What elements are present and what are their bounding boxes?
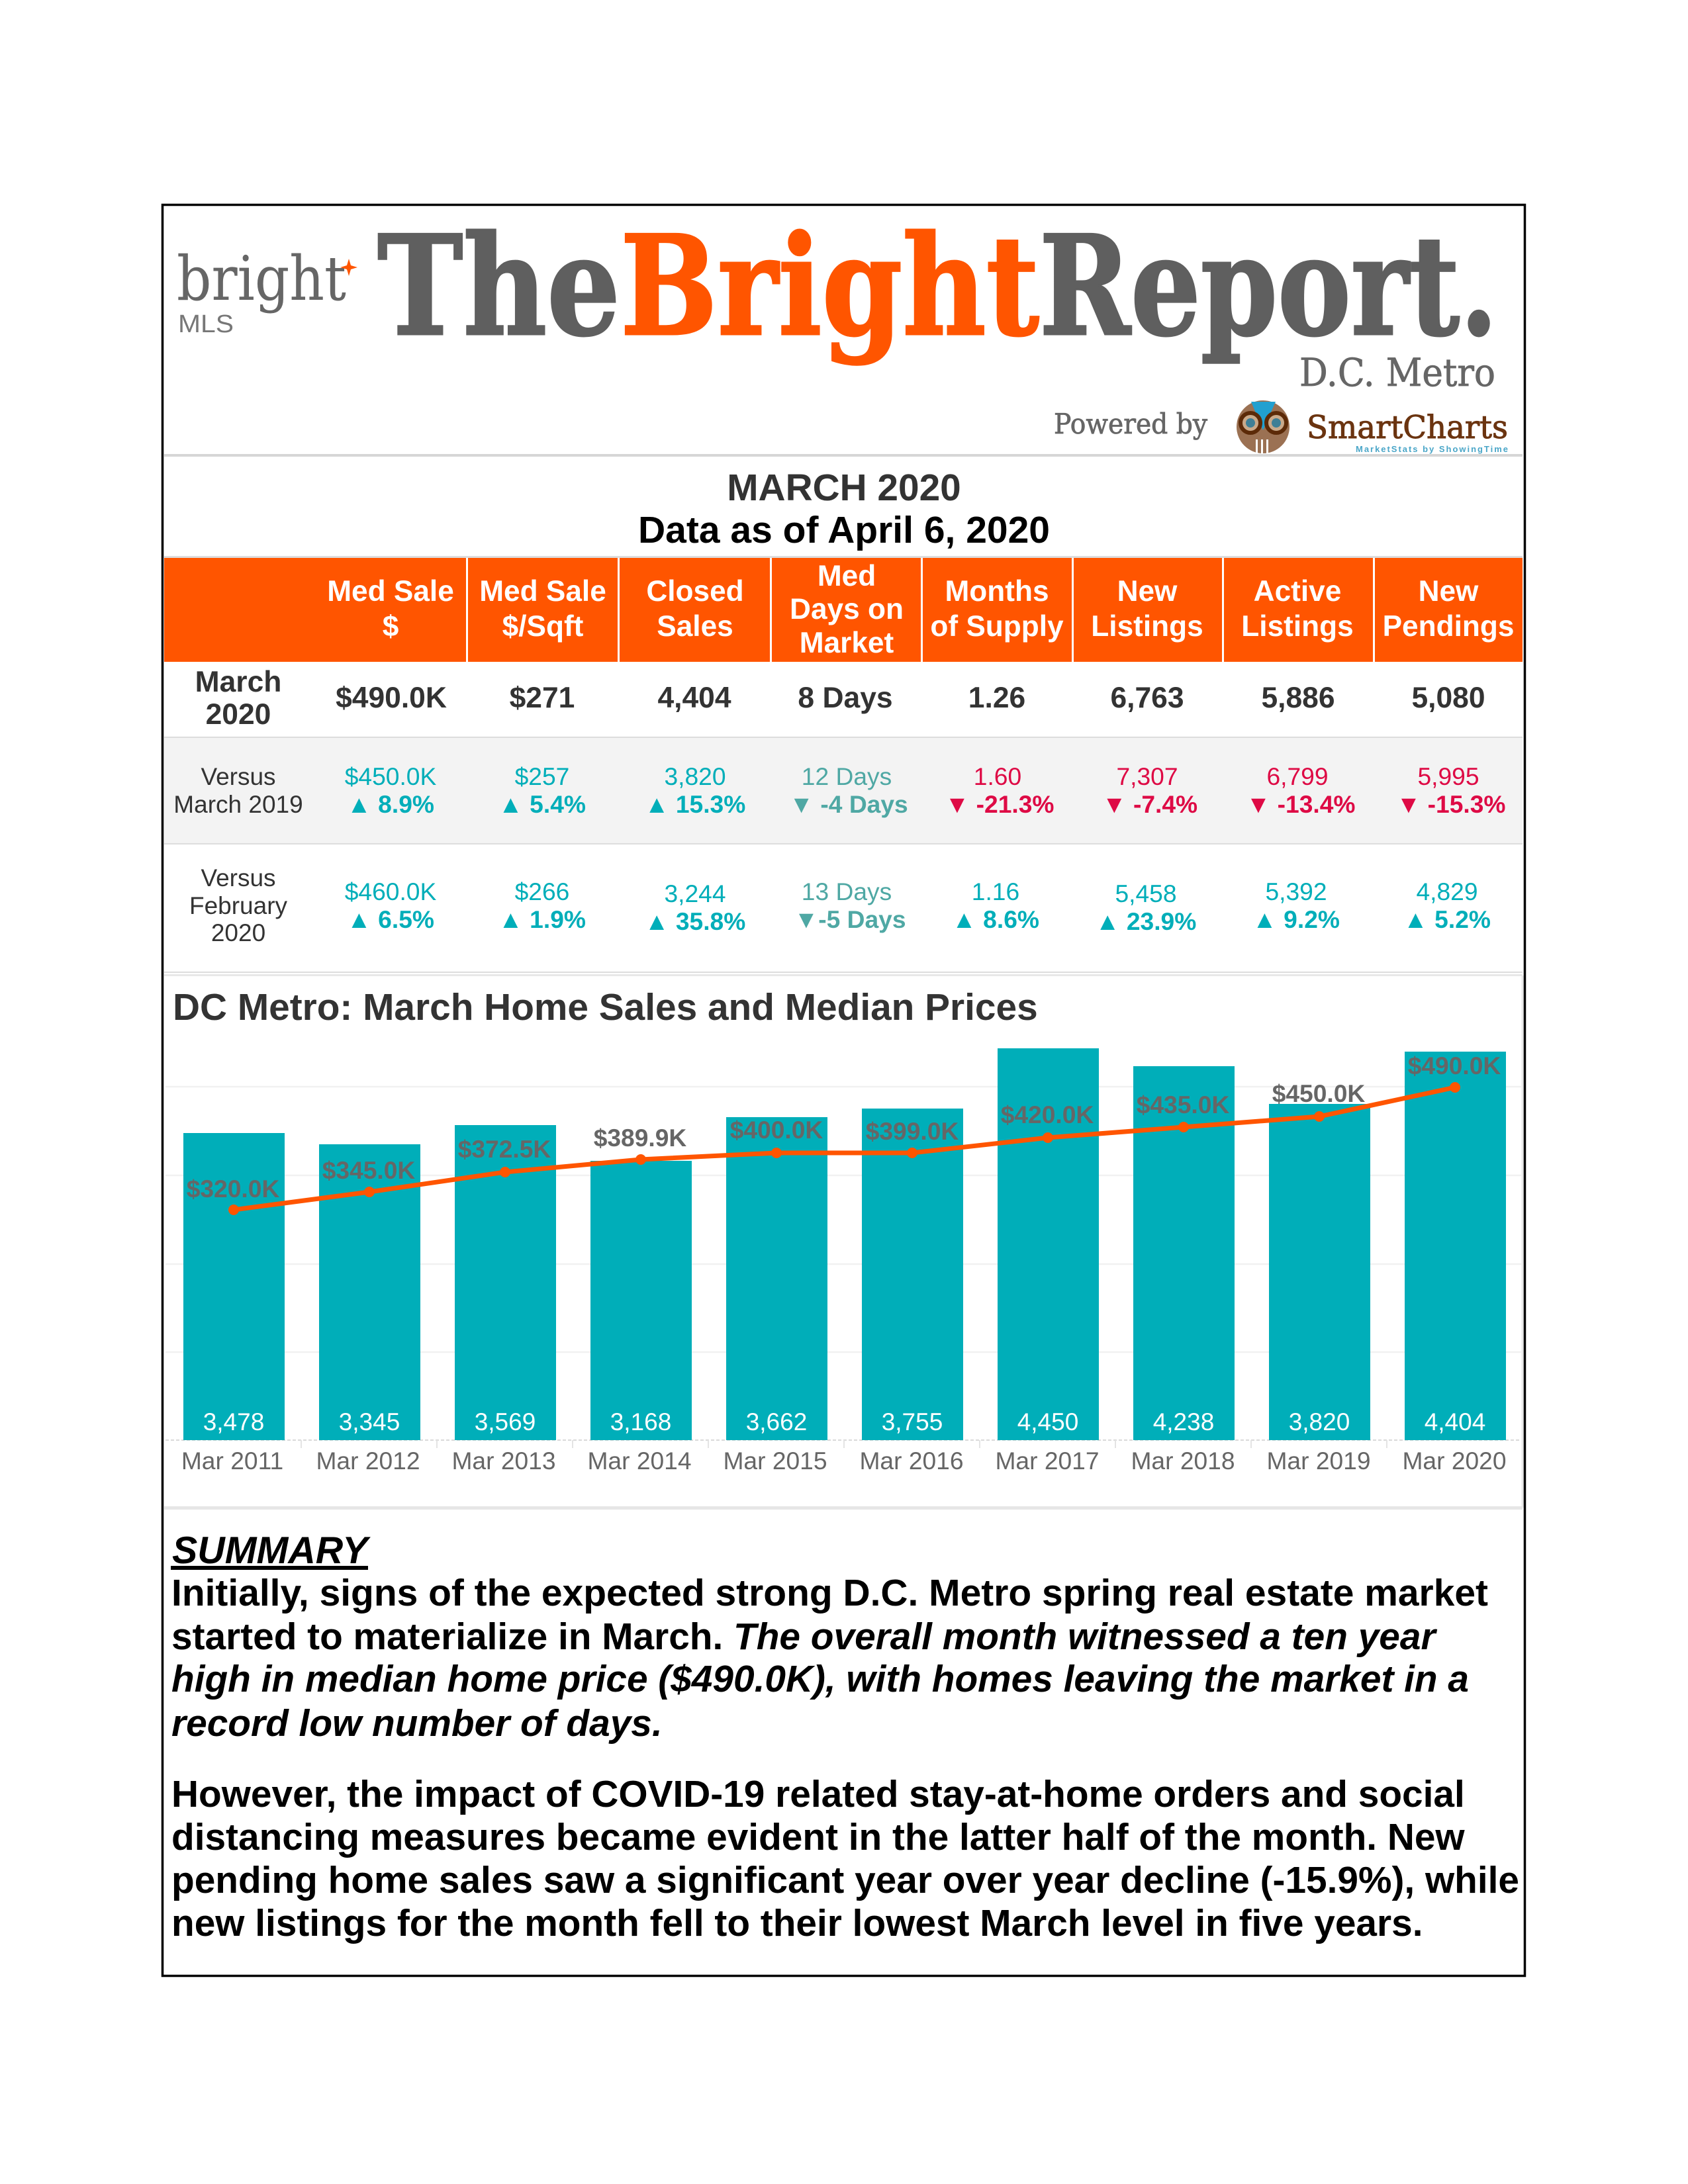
sales count labels: 4,404 [1425,1408,1485,1435]
summary paragraph 2: distancing measures became evident in the latter half of the month. New [171,1817,1465,1858]
chart section frame lines [164,976,1523,1508]
table header band: Listings [1091,610,1203,643]
x axis labels [181,1447,1507,1475]
table row: versus February 2020: 5,458 [1115,880,1177,907]
title: month and data date [638,467,1050,551]
table row: versus February 2020: ▼-5 Days [794,905,906,933]
logo subtitle: D.C. Metro: D.C. Metro [1299,350,1495,395]
logo: The Bright Report wordmark: Bright [620,206,1039,367]
median price line [228,1082,1460,1215]
logo: SmartCharts: MarketStats by ShowingTime [1356,444,1508,454]
bars: closed sales [183,1048,1506,1440]
sales count labels: 3,478 [203,1408,264,1435]
table header band: Med Sale [327,575,454,608]
table header band: Days on [790,593,904,625]
summary paragraph 1: high in median home price ($490.0K), with homes leaving the market in a [171,1659,1469,1700]
table row: versus February 2020: ▲ 8.6% [952,905,1039,933]
table header band: Market [800,627,894,659]
table row: March 2020: $490.0K [336,682,447,714]
x axis labels: Mar 2014 [587,1447,692,1475]
chart title: DC Metro: March Home Sales and Median Prices [173,987,1038,1028]
table row: versus March 2019: 3,820 [664,762,726,790]
table row: versus March 2019: 6,799 [1266,762,1329,790]
price labels: $345.0K [322,1156,415,1184]
title: month and data date: Data as of April 6, 2020 [638,509,1050,551]
sales count labels: 3,820 [1289,1408,1350,1435]
table row: versus March 2019: 12 Days [802,762,892,790]
table row: versus March 2019: ▲ 8.9% [347,790,434,818]
sales count labels: 3,569 [475,1408,536,1435]
sales count labels: 3,755 [882,1408,943,1435]
logo: The Bright Report wordmark: Report. [1039,206,1498,367]
logo: The Bright Report wordmark: The [377,206,620,367]
summary paragraph 2: pending home sales saw a significant year over year decline (-15.9%), while [171,1860,1519,1901]
table row: versus March 2019: 7,307 [1116,762,1178,790]
table row: March 2020: 5,886 [1261,682,1335,714]
table header band: New [1117,575,1178,608]
price labels: $490.0K [1408,1052,1501,1079]
icon: SmartCharts owl [1237,400,1289,454]
summary paragraph 2: new listings for the month fell to their lowest March level in five years. [171,1903,1423,1944]
table row: March 2020: 5,080 [1411,682,1485,714]
sales count labels [203,1408,1485,1435]
logo: SmartCharts: SmartCharts [1307,409,1508,446]
x axis labels: Mar 2011 [181,1447,283,1475]
table row: March 2020 [195,666,1485,731]
table row: versus March 2019: ▲ 15.3% [645,790,745,818]
table row: versus February 2020: 3,244 [664,880,726,907]
table row: versus February 2020: $460.0K [345,878,436,905]
table row: versus March 2019: March 2019 [173,791,303,818]
table row: versus February 2020: ▲ 6.5% [347,905,434,933]
table row: versus February 2020: $266 [515,878,569,905]
price labels: $372.5K [458,1135,551,1163]
logo: bright MLS: bright [177,243,346,314]
table row: March 2020: 2020 [206,698,271,731]
summary paragraph 1: started to materialize in March. The overall month witnessed a ten year [171,1616,1437,1658]
summary paragraph 1 [171,1572,1488,1745]
x axis labels: Mar 2020 [1402,1447,1507,1475]
table row: versus March 2019: ▲ 5.4% [498,790,586,818]
table row: versus March 2019: ▼ -15.3% [1397,790,1505,818]
table row: March 2020: March [195,666,281,698]
table header band: Active [1254,575,1341,608]
price labels: $399.0K [866,1117,959,1145]
table row: versus February 2020: ▲ 1.9% [498,905,586,933]
table header band: Pendings [1383,610,1514,643]
table header band: Med [818,560,876,592]
table header band: of Supply [930,610,1064,643]
table row: versus February 2020: ▲ 23.9% [1096,907,1196,935]
sales count labels: 4,450 [1017,1408,1078,1435]
table row: versus March 2019 [164,737,1523,844]
table row: March 2020: 1.26 [968,682,1025,714]
table row: versus March 2019: 5,995 [1417,762,1479,790]
table header band: Sales [657,610,733,643]
table header band: Med Sale [479,575,606,608]
x axis labels: Mar 2015 [723,1447,827,1475]
table row: versus February 2020: 5,392 [1265,878,1327,905]
table row: versus March 2019: ▼ -4 Days [789,790,908,818]
table header band: Listings [1241,610,1354,643]
table header band: Months [945,575,1049,608]
table row: March 2020: 4,404 [657,682,731,714]
price labels [187,1052,1501,1203]
x axis labels: Mar 2013 [451,1447,556,1475]
price labels: $400.0K [730,1116,823,1144]
x axis labels: Mar 2016 [859,1447,964,1475]
table row: March 2020: 6,763 [1110,682,1184,714]
price labels: $389.9K [594,1124,686,1152]
chart: home sales bars and median price line [165,1048,1521,1475]
table row: versus February 2020: 1.16 [972,878,1019,905]
table row: versus February 2020: Versus [201,864,276,891]
summary divider [164,1506,1523,1510]
table row: versus March 2019: Versus [201,763,276,790]
table row: versus March 2019: ▼ -7.4% [1102,790,1197,818]
table header band: New [1419,575,1479,608]
table row: versus February 2020: February [189,892,288,919]
price labels: $435.0K [1137,1091,1229,1118]
title: month and data date: MARCH 2020 [727,467,961,509]
price labels: $320.0K [187,1175,279,1203]
summary paragraph 2 [171,1774,1519,1944]
table row: versus February 2020 [164,864,1523,973]
header divider [164,454,1523,457]
table row: March 2020: $271 [510,682,575,714]
x axis labels: Mar 2017 [995,1447,1100,1475]
summary paragraph 1: Initially, signs of the expected strong D.C. Metro spring real estate market [171,1572,1488,1614]
sales count labels: 4,238 [1153,1408,1214,1435]
table header band [164,556,1523,662]
table header band: $ [383,610,399,643]
x axis labels: Mar 2012 [316,1447,420,1475]
table row: March 2020: 8 Days [798,682,893,714]
x axis labels: Mar 2018 [1131,1447,1235,1475]
logo: bright MLS: MLS [178,310,234,338]
summary heading: SUMMARY [172,1529,371,1572]
x axis labels: Mar 2019 [1266,1447,1371,1475]
table row: versus March 2019: 1.60 [974,762,1021,790]
table row: versus February 2020: 4,829 [1416,878,1478,905]
sales count labels: 3,662 [746,1408,807,1435]
powered by label: Powered by [1054,408,1207,440]
table row: versus March 2019: $450.0K [345,762,436,790]
sales count labels: 3,168 [610,1408,671,1435]
table row: versus February 2020: 2020 [211,919,265,946]
table row: versus February 2020: ▲ 5.2% [1403,905,1491,933]
sales count labels: 3,345 [339,1408,400,1435]
summary paragraph 2: However, the impact of COVID-19 related stay-at-home orders and social [171,1774,1465,1815]
price labels: $420.0K [1001,1101,1094,1128]
summary paragraph 1: record low number of days. [171,1703,663,1745]
table header band: $/Sqft [502,610,584,643]
table row: versus February 2020: ▲ 35.8% [645,907,745,935]
table header band: Closed [646,575,744,608]
table row: versus March 2019: ▼ -21.3% [945,790,1054,818]
table row: versus March 2019: $257 [515,762,569,790]
table row: versus February 2020: 13 Days [802,878,892,905]
logo: The Bright Report wordmark [377,206,1498,367]
table row: versus February 2020: ▲ 9.2% [1252,905,1340,933]
price labels: $450.0K [1272,1079,1365,1107]
report frame [163,205,1525,1976]
table row: versus March 2019: ▼ -13.4% [1246,790,1355,818]
